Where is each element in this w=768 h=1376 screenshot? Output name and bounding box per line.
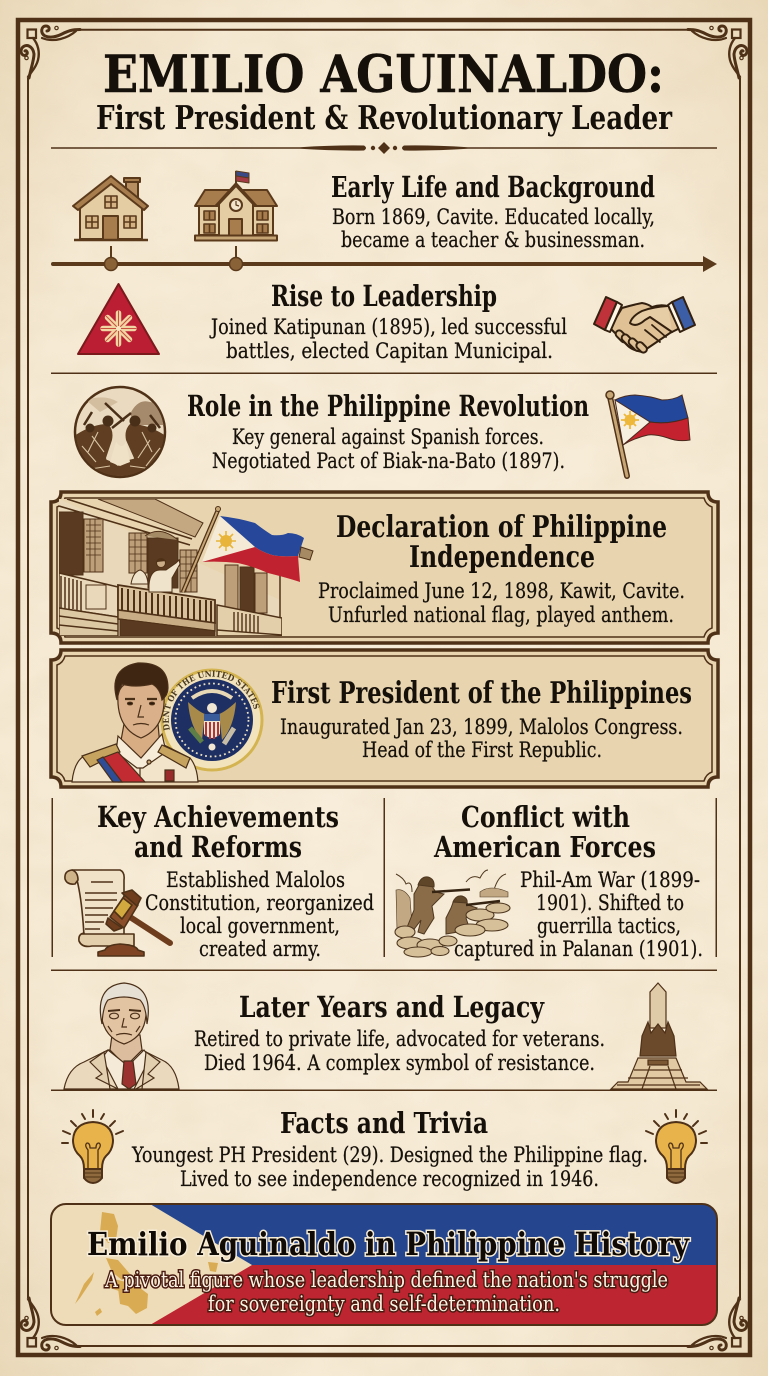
heading: declaration: Independence (409, 539, 595, 574)
text: conflict: Phil-Am War (1899- (520, 868, 700, 893)
title: EMILIO AGUINALDO: (103, 45, 664, 105)
text: facts: Youngest PH President (29). Designed the Philippine flag. (131, 1143, 648, 1168)
heading: rise: Rise to Leadership (271, 279, 497, 313)
banner: in Philippine history (51, 1204, 717, 1325)
text: key achievements: Established Malolos (166, 868, 345, 893)
banner text: for sovereignty and self-determination. (208, 1292, 560, 1317)
heading: conflict: American Forces (433, 830, 656, 864)
timeline arrow (51, 246, 717, 272)
title (96, 45, 673, 137)
text: key achievements (145, 868, 374, 962)
section: conflict with American forces (395, 800, 703, 962)
text: early life: became a teacher & businessman. (341, 228, 645, 253)
text: declaration: Unfurled national flag, played anthem. (328, 603, 674, 628)
icon: handshake (594, 297, 695, 354)
text: key achievements: Constitution, reorganized (145, 891, 374, 916)
section: later years and legacy (51, 983, 717, 1091)
title: First President & Revolutionary Leader (96, 98, 673, 137)
text: role: Negotiated Pact of Biak-na-Bato (1897). (212, 449, 565, 474)
heading: first president: First President of the Philippines (271, 675, 692, 710)
text: first president: Inaugurated Jan 23, 1899, Malolos Congress. (280, 715, 683, 740)
icon: Philippine flag (606, 391, 690, 476)
heading: key achievements: Key Achievements (97, 800, 339, 834)
icon: schoolhouse with flag (195, 171, 277, 240)
text: declaration: Proclaimed June 12, 1898, Kawit, Cavite. (318, 579, 685, 604)
text: early life (332, 205, 655, 253)
section: rise to leadership (51, 279, 717, 374)
text: role (212, 425, 565, 474)
heading: conflict (433, 800, 656, 864)
section: key achievements (65, 800, 374, 962)
icon: battle medallion (74, 387, 170, 480)
text: later years: Died 1964. A complex symbol of resistance. (204, 1051, 595, 1076)
icon: Katipunan triangle (78, 284, 159, 354)
text: conflict (454, 868, 703, 962)
text: later years (194, 1027, 605, 1076)
text: rise (209, 315, 567, 364)
divider (51, 970, 717, 971)
section: facts and trivia (62, 1106, 707, 1192)
icon: presidential seal (160, 668, 264, 772)
heading: conflict: Conflict with (461, 800, 630, 834)
icon: light bulb left (62, 1110, 123, 1183)
text: first president: Head of the First Republic. (362, 738, 602, 763)
icon: scroll and gavel (65, 870, 170, 956)
heading: facts: Facts and Trivia (280, 1106, 488, 1140)
banner text (104, 1268, 668, 1317)
text: rise: battles, elected Capitan Municipal. (226, 339, 553, 364)
portrait: elderly Aguinaldo (64, 983, 179, 1089)
banner flag background (51, 1204, 717, 1325)
text: facts (131, 1143, 648, 1192)
section: role in revolution (74, 387, 690, 480)
section: early life (51, 170, 717, 272)
heading: declaration (336, 509, 667, 574)
heading: key achievements (97, 800, 339, 864)
heading: role: Role in the Philippine Revolution (187, 389, 589, 423)
divider (51, 1090, 717, 1091)
heading: early life: Early Life and Background (331, 170, 655, 204)
text: conflict: 1901). Shifted to (536, 891, 684, 916)
title divider (51, 142, 717, 154)
divider (51, 372, 717, 374)
text: conflict: captured in Palanan (1901). (454, 937, 703, 962)
text: role: Key general against Spanish forces. (232, 425, 544, 450)
text: rise: Joined Katipunan (1895), led successful (209, 315, 567, 340)
text: early life: Born 1869, Cavite. Educated locally, (332, 205, 655, 230)
text: conflict: guerrilla tactics, (537, 914, 681, 939)
text: declaration (318, 579, 685, 628)
panel: first president (49, 648, 720, 789)
text: later years: Retired to private life, advocated for veterans. (194, 1027, 605, 1052)
heading: declaration: Declaration of Philippine (336, 509, 667, 544)
panel: declaration of independence (51, 492, 718, 643)
heading: key achievements: and Reforms (134, 830, 302, 864)
map of the Philippines (75, 1212, 218, 1316)
heading: later years: Later Years and Legacy (239, 990, 545, 1024)
text: key achievements: local government, (180, 914, 340, 939)
banner text: A pivotal figure whose leadership defined the nation's struggle (104, 1268, 668, 1293)
icon: presidential seal: DENT OF THE UNITED STATES (162, 670, 260, 731)
portrait: young Aguinaldo (72, 663, 198, 782)
icon: house (73, 176, 148, 240)
illustration: soldiers in trench (395, 870, 510, 957)
text: facts: Lived to see independence recognized in 1946. (180, 1167, 599, 1192)
icon: Rizal monument (611, 983, 707, 1089)
banner heading: Emilio Aguinaldo in Philippine History (87, 1225, 690, 1263)
text: key achievements: created army. (199, 937, 321, 962)
illustration: balcony and flag (59, 499, 313, 636)
column dividers (52, 798, 717, 957)
icon: light bulb right (646, 1110, 707, 1183)
text: first president (280, 715, 683, 763)
